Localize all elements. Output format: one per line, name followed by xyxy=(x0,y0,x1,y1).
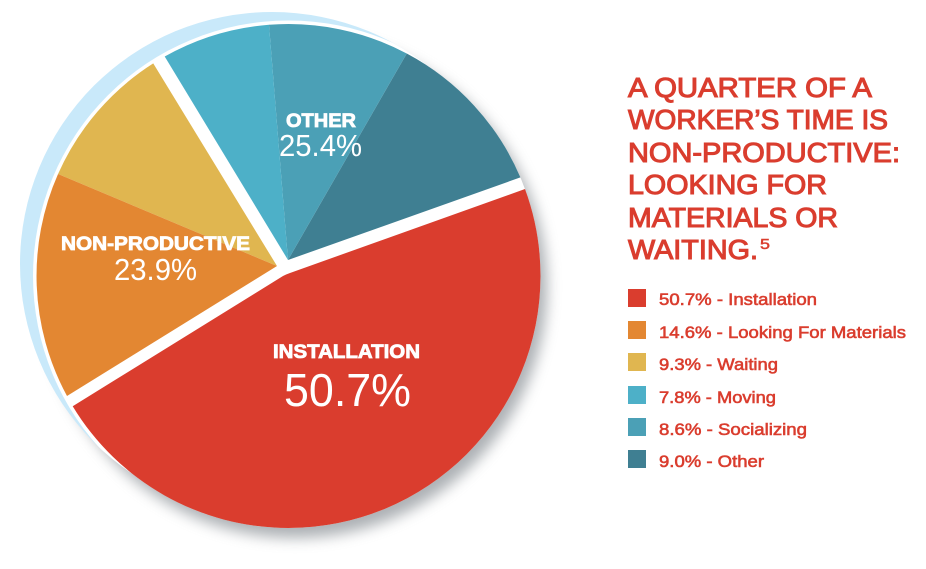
label: other: 25.4% xyxy=(279,128,362,163)
legend item: moving: 7.8% - Moving xyxy=(659,388,776,407)
heading: A QUARTER OF A xyxy=(628,72,872,103)
heading: WORKER’S TIME IS xyxy=(628,104,888,135)
light blue offset crescent xyxy=(20,12,524,516)
label: installation xyxy=(273,342,420,416)
legend item: looking for materials: 14.6% - Looking For Materials xyxy=(659,323,906,342)
heading xyxy=(628,72,900,265)
white pie base showing through wedge gaps xyxy=(36,24,540,528)
wedge: moving xyxy=(165,25,288,260)
wedge: other xyxy=(288,54,520,260)
label: other xyxy=(279,111,362,163)
heading: 5 xyxy=(760,236,770,253)
legend item: moving xyxy=(628,386,776,407)
drop shadow xyxy=(43,34,547,538)
wedge: looking for materials xyxy=(37,174,277,396)
legend item: socializing xyxy=(628,418,807,439)
pie chart xyxy=(20,12,547,538)
wedge: socializing xyxy=(269,24,407,260)
legend item: socializing: 8.6% - Socializing xyxy=(659,420,807,439)
legend item: waiting: 9.3% - Waiting xyxy=(659,355,778,374)
legend item: other xyxy=(628,450,764,471)
legend item: other: 9.0% - Other xyxy=(659,452,764,471)
legend item: waiting xyxy=(628,353,778,374)
wedge: installation xyxy=(73,189,540,528)
heading: MATERIALS OR xyxy=(628,202,838,233)
heading: LOOKING FOR xyxy=(628,169,827,200)
wedge: waiting xyxy=(58,63,277,266)
label: installation: INSTALLATION xyxy=(273,342,420,363)
label: non-productive: NON-PRODUCTIVE xyxy=(61,234,250,255)
legend item: installation: 50.7% - Installation xyxy=(659,290,817,309)
label: installation: 50.7% xyxy=(284,364,411,416)
white gap between crescent and pie xyxy=(33,20,427,473)
label: other: OTHER xyxy=(286,111,356,132)
heading: WAITING. xyxy=(628,234,758,265)
label: non-productive: 23.9% xyxy=(114,252,197,287)
legend xyxy=(628,289,906,471)
heading: NON-PRODUCTIVE: xyxy=(628,137,900,168)
label: non-productive xyxy=(61,234,250,287)
